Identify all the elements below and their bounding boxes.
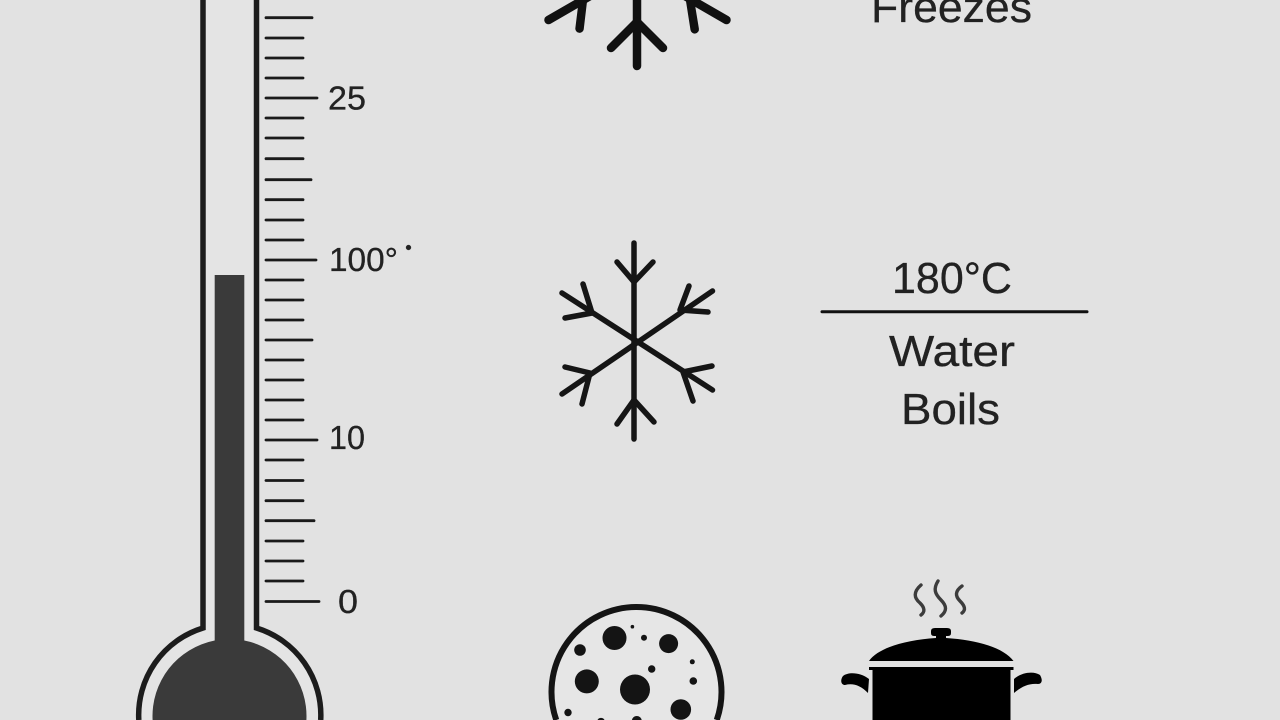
thermometer mercury fill — [152, 275, 307, 720]
scale label 10: 10 — [329, 419, 365, 456]
thermometer — [139, 0, 321, 720]
thermometer outline stroke — [139, 0, 321, 720]
icon: snowflake — [562, 243, 712, 439]
stray dot beside label — [406, 245, 411, 250]
right handle — [1014, 673, 1042, 693]
icon: cropped snowflake at top — [544, 0, 731, 70]
pot lid — [869, 628, 1014, 661]
scale label 100 degrees: 100° — [329, 241, 398, 278]
pot rim and body — [869, 667, 1014, 720]
icon: circle with bubbles — [552, 607, 722, 720]
label word water: Water — [889, 327, 1015, 376]
icon: steaming pot — [841, 581, 1042, 720]
thermometer scale ticks — [266, 18, 319, 601]
bubbles — [564, 625, 697, 720]
scale label 0: 0 — [338, 583, 358, 620]
thermometer tube and bulb outline — [139, 0, 321, 720]
temperature value: 180°C — [892, 254, 1012, 303]
left handle — [841, 673, 869, 693]
label word boils: Boils — [901, 385, 1000, 434]
text block: water boils — [822, 254, 1087, 434]
steam — [915, 581, 964, 616]
scale label 25: 25 — [328, 80, 366, 116]
divider rule — [822, 310, 1087, 313]
circle outline — [552, 607, 722, 720]
scale labels — [328, 80, 411, 620]
